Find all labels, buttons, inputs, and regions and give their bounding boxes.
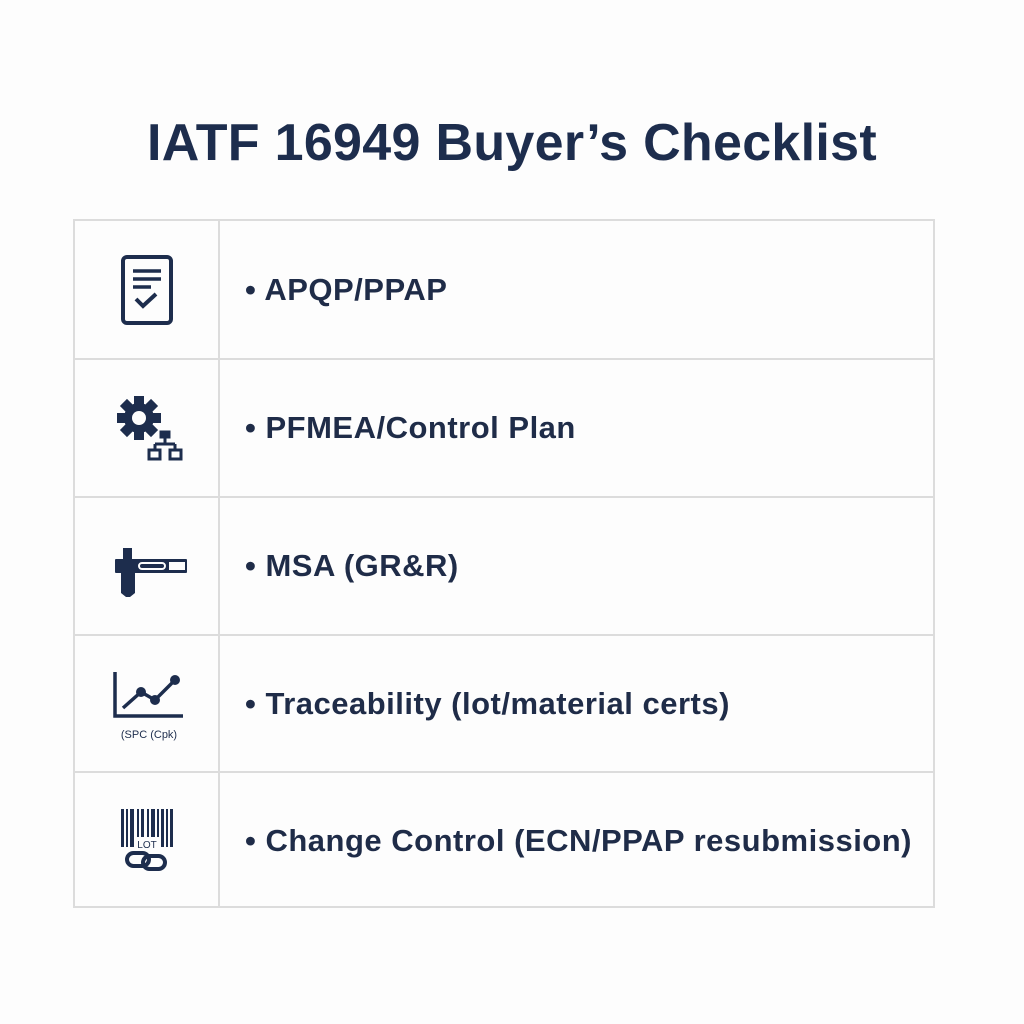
icon: SPC chart: (SPC (Cpk) — [121, 729, 177, 741]
icon: document check — [75, 221, 220, 358]
icon: gear and hierarchy — [75, 360, 220, 496]
text: APQP/PPAP: • APQP/PPAP — [245, 272, 447, 306]
row: PFMEA — [75, 358, 933, 496]
icon: barcode lot link: LOT — [137, 840, 157, 851]
text: PFMEA/Control Plan: • PFMEA/Control Plan — [245, 410, 576, 445]
row: Change Control — [75, 771, 933, 908]
text: Change Control: • Change Control (ECN/PPAP resubmission) — [245, 822, 912, 858]
icon: barcode lot link — [75, 773, 220, 908]
title: IATF 16949 Buyer’s Checklist — [147, 114, 877, 172]
text: MSA: • MSA (GR&R) — [245, 548, 459, 583]
row: APQP/PPAP — [121, 221, 447, 358]
row: MSA — [75, 496, 933, 634]
icon: caliper — [75, 498, 220, 634]
text: Traceability: • Traceability (lot/material certs) — [245, 686, 730, 721]
panel: checklist table — [73, 219, 935, 908]
icon: SPC chart — [75, 636, 220, 772]
row: Traceability — [75, 634, 933, 772]
